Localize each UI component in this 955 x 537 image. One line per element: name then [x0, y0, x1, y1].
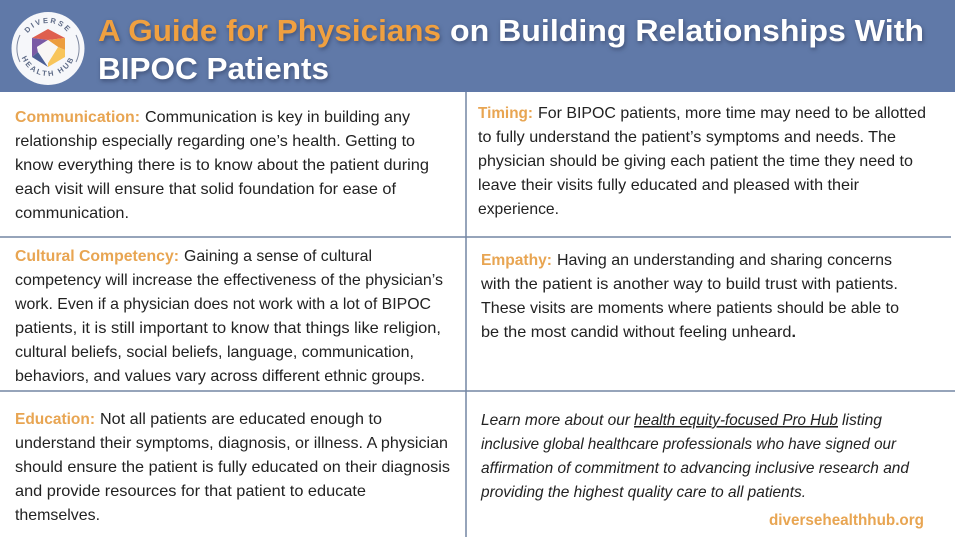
- panel: education: themselves.: [15, 507, 100, 524]
- panel: communication: communication.: [15, 205, 129, 222]
- panel: education: Education:: [15, 411, 95, 428]
- panel: timing: For BIPOC patients, more time may need to be allotted: [538, 105, 926, 122]
- panel: pro hub note: [480, 412, 910, 501]
- panel: empathy: with the patient is another way to build trust with patients.: [480, 276, 898, 293]
- panel: timing: to fully understand the patient’s symptoms and needs. The: [478, 129, 896, 146]
- panel: timing: experience.: [478, 201, 559, 218]
- panel: timing: physician should be giving each patient the time they need to: [478, 153, 913, 170]
- panel: cultural competency: [14, 248, 443, 385]
- panel: pro hub note: Learn more about our: [481, 412, 631, 429]
- title: on Building Relationships With: [450, 14, 924, 48]
- panel: cultural competency: patients, it is still important to know that things like religion,: [15, 320, 441, 337]
- panel: pro hub note: inclusive global healthcare professionals who have signed our: [481, 436, 897, 453]
- panel: cultural competency: Gaining a sense of cultural: [184, 248, 372, 265]
- panel: timing: leave their visits fully educated and pleased with their: [478, 177, 859, 194]
- panel: cultural competency: competency will increase the effectiveness of the physician’s: [15, 272, 443, 289]
- panel: cultural competency: Cultural Competency:: [15, 248, 179, 265]
- panel: empathy: Having an understanding and sharing concerns: [557, 252, 892, 269]
- panel: timing: [478, 105, 926, 218]
- panel: pro hub note: health equity-focused Pro Hub: [634, 412, 838, 429]
- website link: diversehealthhub.org: [769, 512, 924, 529]
- panel: cultural competency: cultural beliefs, social beliefs, language, communication,: [15, 344, 414, 361]
- title: A Guide for Physicians: [98, 14, 441, 48]
- panel: pro hub note: listing: [842, 412, 882, 429]
- panel: communication: each visit will ensure that solid foundation for ease of: [15, 181, 397, 198]
- panel: pro hub note: affirmation of commitment to advancing inclusive research and: [481, 460, 910, 477]
- panel: cultural competency: work. Even if a physician does not work with a lot of BIPOC: [14, 296, 431, 313]
- title: [98, 14, 924, 86]
- panel: education: and provide resources for that patient to educate: [15, 483, 366, 500]
- panel: pro hub note: providing the highest quality care to all patients.: [480, 484, 806, 501]
- title: BIPOC Patients: [98, 52, 329, 86]
- panel: communication: Communication:: [15, 109, 140, 126]
- panel: education: [15, 411, 450, 524]
- panel: cultural competency: behaviors, and values vary across different ethnic groups.: [15, 368, 425, 385]
- panel: timing: Timing:: [478, 105, 533, 122]
- panel: empathy: [480, 252, 899, 341]
- panel: empathy: Empathy:: [481, 252, 552, 269]
- header banner: [0, 0, 955, 92]
- panel: education: Not all patients are educated enough to: [100, 411, 382, 428]
- icon: Diverse Health Hub logo: [12, 12, 84, 85]
- panel: education: understand their symptoms, diagnosis, or illness. A physician: [15, 435, 448, 452]
- panel: communication: [15, 109, 429, 222]
- panel: communication: know everything there is to know about the patient during: [15, 157, 429, 174]
- panel: empathy: These visits are moments where patients should be able to: [481, 300, 899, 317]
- icon: Diverse Health Hub logo: HEALTH HUB: [22, 56, 73, 76]
- panel: empathy: be the most candid without feeling unheard .: [481, 324, 796, 341]
- panel: communication: relationship especially regarding one’s health. Getting to: [15, 133, 415, 150]
- icon: Diverse Health Hub logo: DIVERSE: [24, 18, 70, 33]
- panel: communication: Communication is key in building any: [145, 109, 410, 126]
- panel: education: should ensure the patient is fully educated on their diagnosis: [15, 459, 450, 476]
